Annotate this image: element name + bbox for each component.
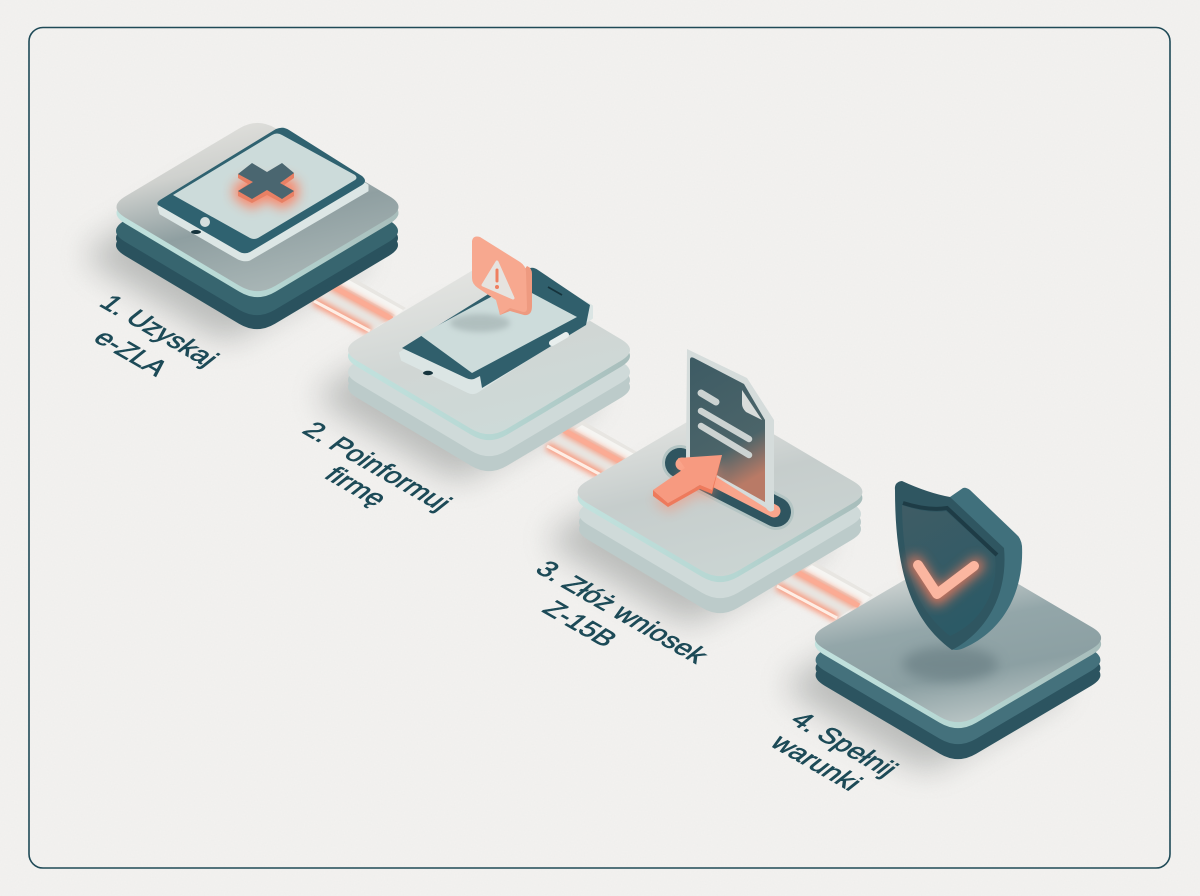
label: step 4: 4. Spełnij <box>784 707 904 781</box>
icon: document in slot with upload arrow <box>653 349 776 513</box>
icon: shield with check mark <box>895 481 1022 650</box>
icon: alert speech bubble <box>472 236 532 315</box>
connector 2 to 3 <box>547 421 639 476</box>
glass plate <box>116 123 398 297</box>
label: step 1: 1. Uzyskaj <box>93 290 225 371</box>
label: step 4: warunki <box>763 730 869 795</box>
connector 3 to 4 <box>777 561 873 618</box>
glass plate <box>348 266 630 440</box>
step 3: platform and document <box>578 349 862 613</box>
step 1: platform and tablet <box>116 123 398 329</box>
step 4: platform and shield <box>815 481 1101 759</box>
connector 1 to 2 <box>314 276 406 331</box>
label: step 1: e-ZLA <box>87 325 175 380</box>
label: step 2: 2. Poinformuj <box>296 417 458 515</box>
step 2: platform and phone with alert <box>348 236 630 471</box>
dark base plate <box>116 147 398 329</box>
label: step 3: Z-15B <box>536 596 624 651</box>
light base plate <box>348 288 630 471</box>
light base plate <box>579 430 861 613</box>
icon: tablet with medical cross <box>157 127 368 261</box>
icon: phone <box>400 268 592 393</box>
dark base plate <box>816 576 1100 759</box>
label: step 3: 3. Złóż wniosek <box>529 556 715 668</box>
glass plate <box>815 554 1101 728</box>
cast shadows <box>88 174 1064 768</box>
label: step 2: firmę <box>318 462 394 511</box>
glass plate <box>578 408 862 582</box>
